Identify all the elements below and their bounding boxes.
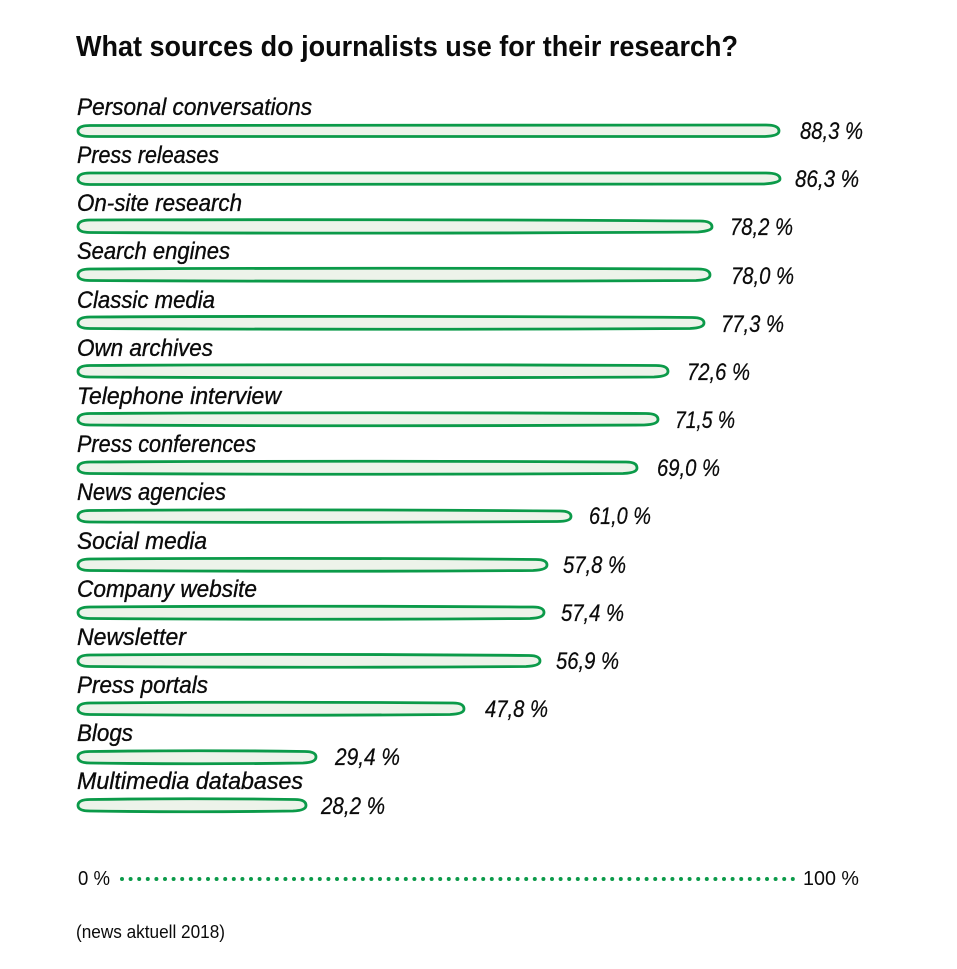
row: Telephone interview: Telephone interview [77, 383, 283, 410]
row: Company website: 57,4 % [561, 600, 624, 627]
row: Social media: 57,8 % [563, 552, 626, 579]
row: Search engines [77, 238, 794, 290]
row: On-site research [77, 190, 793, 241]
row: Press portals: 47,8 % [485, 696, 548, 723]
row: Press releases [77, 142, 859, 193]
row: Company website: Company website [77, 576, 257, 603]
row: Newsletter: Newsletter [77, 624, 187, 651]
axis: scale 0 to 100 percent: 0 % [78, 868, 110, 890]
row: Search engines: Search engines [77, 238, 230, 265]
row: Press conferences: 69,0 % [657, 455, 720, 482]
axis: scale 0 to 100 percent: 100 % [803, 868, 859, 890]
row: Newsletter: 56,9 % [556, 648, 619, 675]
row: Blogs: Blogs [77, 720, 133, 747]
row: Multimedia databases: Multimedia databases [77, 768, 303, 795]
row: Own archives [77, 335, 750, 386]
row: Telephone interview: 71,5 % [675, 407, 735, 434]
row: News agencies: News agencies [77, 479, 226, 506]
row: Multimedia databases [77, 768, 385, 820]
row: Press conferences: Press conferences [77, 431, 256, 458]
row: On-site research: On-site research [77, 190, 242, 217]
row: Press portals: Press portals [77, 672, 208, 699]
row: Own archives: 72,6 % [687, 359, 750, 386]
row: Press conferences [77, 431, 720, 482]
row: News agencies [77, 479, 651, 530]
row: Classic media [77, 287, 784, 338]
row: Telephone interview [77, 383, 735, 434]
row: Company website [77, 576, 624, 627]
row: Social media [77, 528, 626, 579]
row: On-site research: 78,2 % [730, 214, 793, 241]
title: What sources do journalists use for their research? [76, 31, 738, 63]
row: Multimedia databases: 28,2 % [320, 793, 385, 820]
row: News agencies: 61,0 % [589, 503, 651, 530]
row: Press releases: 86,3 % [795, 166, 859, 193]
row: Social media: Social media [77, 528, 207, 555]
row: Classic media: 77,3 % [721, 311, 784, 338]
row: Newsletter [77, 624, 619, 675]
row: Search engines: 78,0 % [731, 263, 794, 290]
row: Blogs [77, 720, 400, 771]
row: Blogs: 29,4 % [334, 744, 400, 771]
row: Press releases: Press releases [77, 142, 219, 169]
bar chart [77, 94, 863, 820]
row: Press portals [77, 672, 548, 723]
row: Personal conversations: Personal conversations [77, 94, 312, 121]
row: Own archives: Own archives [77, 335, 213, 362]
axis: scale 0 to 100 percent [78, 868, 859, 890]
row: Classic media: Classic media [77, 287, 215, 314]
row: Personal conversations [77, 94, 863, 145]
row: Personal conversations: 88,3 % [800, 118, 863, 145]
source note: (news aktuell 2018) [76, 922, 225, 942]
